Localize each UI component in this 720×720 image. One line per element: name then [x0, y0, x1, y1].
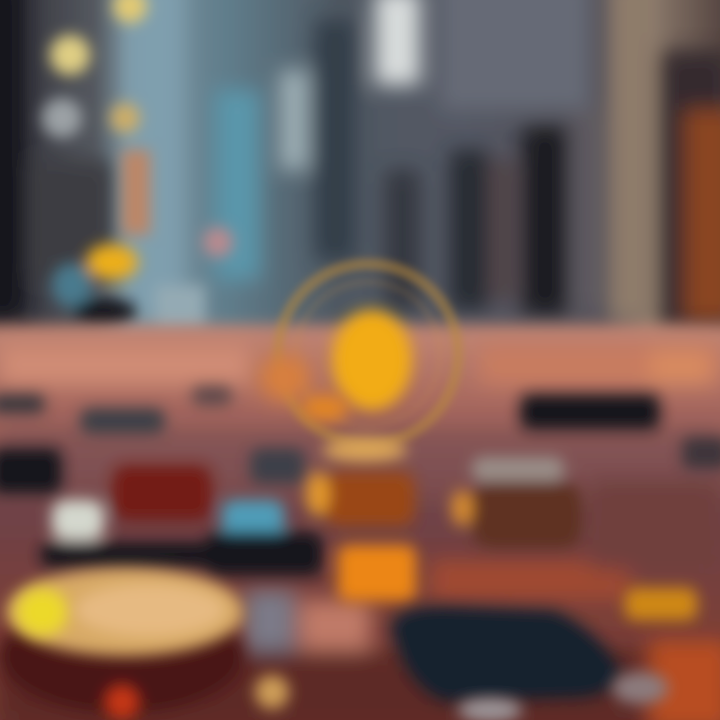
background buildings: [0, 0, 720, 360]
dark table objects: [0, 386, 720, 494]
dark car roof: [390, 606, 668, 720]
central glowing coin: [259, 264, 458, 462]
street surface: [0, 325, 720, 720]
large glowing bowl: [0, 568, 289, 720]
cups and bowls: [40, 457, 697, 620]
street lights and bokeh: [42, 0, 233, 330]
